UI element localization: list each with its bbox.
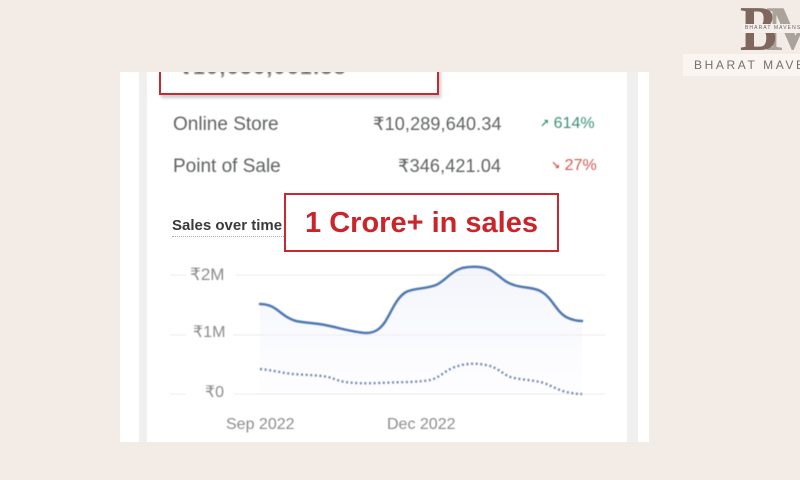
panel: left grey gutter bbox=[139, 72, 147, 442]
grid lines bbox=[170, 275, 605, 394]
area fill under line bbox=[260, 267, 582, 394]
axis label: Dec 2022: Dec 2022 bbox=[387, 416, 456, 433]
callout: top red box with cut-off value bbox=[159, 52, 439, 95]
value: point of sale sales: ₹346,421.04 bbox=[398, 156, 501, 176]
label: point of sale: Point of Sale bbox=[173, 156, 281, 177]
label: online store: Online Store bbox=[173, 114, 279, 135]
icon: up arrow with 614 percent: ↗ 614% bbox=[540, 115, 595, 132]
axis label: Sep 2022: Sep 2022 bbox=[226, 416, 295, 433]
axis label: 1M: ₹1M bbox=[193, 324, 225, 341]
heading: sales over time: Sales over time bbox=[172, 217, 282, 234]
axis label: 0: ₹0 bbox=[205, 384, 224, 401]
axis label: 2M: ₹2M bbox=[190, 265, 224, 284]
panel: right grey gutter bbox=[627, 72, 638, 442]
line: current period sales bbox=[260, 267, 582, 333]
icon: down arrow with 27 percent: ↘ 27% bbox=[551, 157, 597, 174]
logo: Bharat Mavens bbox=[683, 0, 800, 76]
logo small strap bbox=[742, 24, 800, 33]
value: online store sales: ₹10,289,640.34 bbox=[373, 114, 502, 134]
callout: 1 Crore+ in sales bbox=[284, 193, 559, 252]
line chart: sales over time bbox=[170, 264, 605, 396]
callout: 1 Crore+ in sales: 1 Crore+ in sales bbox=[305, 207, 538, 239]
logo small strap: BHARAT MAVENS bbox=[745, 25, 800, 31]
logo name band bbox=[683, 54, 800, 76]
line: comparison period dotted bbox=[260, 364, 582, 394]
panel: dashboard screenshot bbox=[120, 72, 649, 442]
